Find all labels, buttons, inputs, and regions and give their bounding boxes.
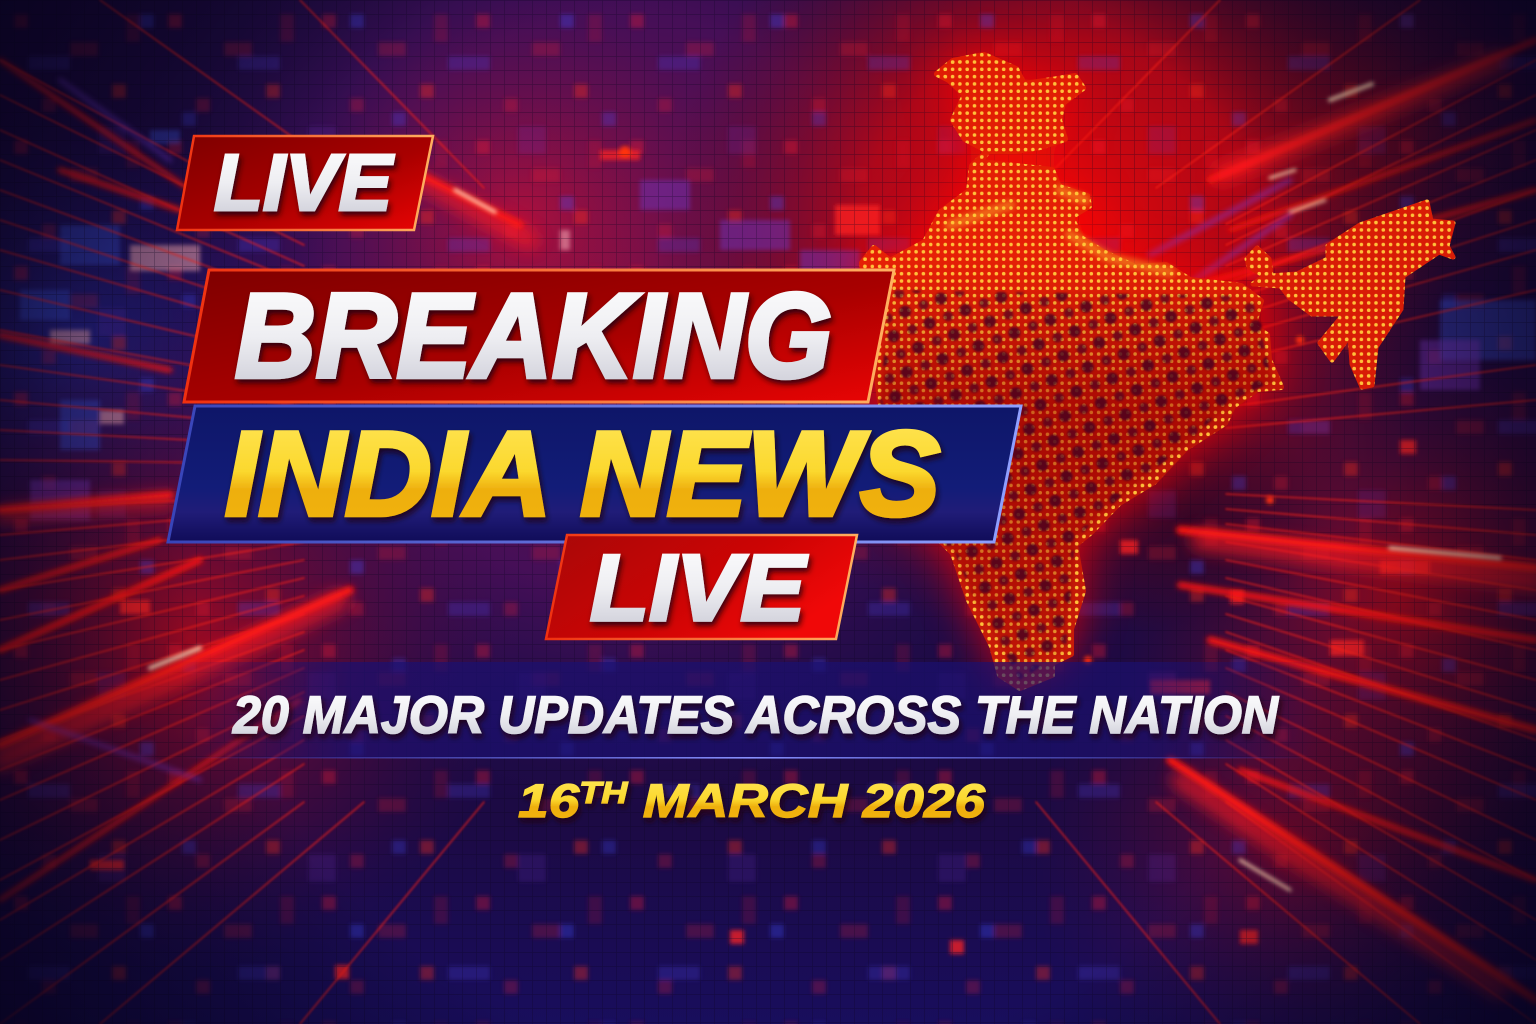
banner: top LIVE	[177, 136, 433, 230]
banner: BREAKING: BREAKING	[235, 269, 832, 403]
map mainland shape	[862, 55, 1281, 688]
map glow	[862, 55, 1281, 688]
date: 16	[518, 774, 570, 827]
banner: top LIVE: LIVE	[214, 138, 395, 227]
banner: INDIA NEWS: INDIA NEWS	[225, 407, 940, 541]
map northeast shape	[1247, 202, 1453, 387]
subtitle band	[180, 662, 1320, 759]
banner: lower LIVE: LIVE	[590, 535, 808, 640]
subtitle: 20 MAJOR UPDATES ACROSS THE NATION	[232, 686, 1280, 745]
date: TH	[579, 775, 628, 810]
banner: lower LIVE	[546, 535, 857, 640]
date: MARCH 2026	[628, 774, 986, 827]
India map	[862, 55, 1453, 688]
